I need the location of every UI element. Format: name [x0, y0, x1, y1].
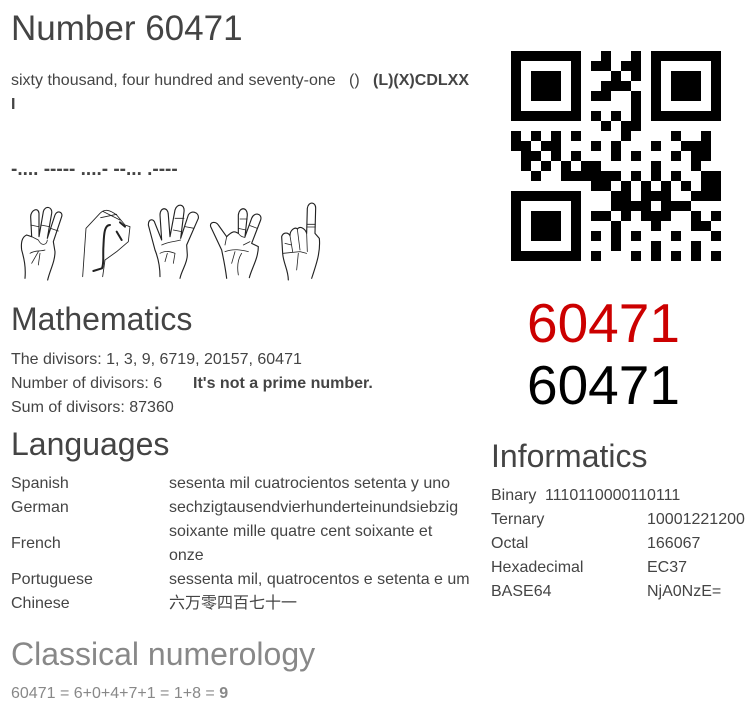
informatics table: 10001221200	[647, 511, 745, 528]
numerology sum: 60471 = 6+0+4+7+1 = 1+8 = 9	[11, 685, 228, 702]
morse code: -.... ----- ....- --... .----	[11, 159, 178, 180]
languages table: sechzigtausendvierhunderteinundsiebzig	[169, 499, 458, 516]
languages table: onze	[169, 547, 204, 564]
number in words and roman numeral: sixty thousand, four hundred and seventy-one	[11, 72, 336, 89]
divisors block: Number of divisors: 6	[11, 375, 162, 392]
number in words and roman numeral: ()	[349, 72, 360, 89]
informatics table: Hexadecimal	[491, 559, 583, 576]
number in words and roman numeral: I	[11, 96, 15, 113]
languages table: Chinese	[11, 595, 70, 612]
languages table: soixante mille quatre cent soixante et	[169, 523, 432, 540]
languages table: 六万零四百七十一	[169, 595, 297, 612]
icon: hand sign 7	[210, 209, 261, 278]
divisors block: The divisors: 1, 3, 9, 6719, 20157, 60471	[11, 351, 302, 368]
informatics table: BASE64	[491, 583, 551, 600]
languages table: German	[11, 499, 69, 516]
heading: mathematics: Mathematics	[11, 301, 192, 337]
sign language hands	[20, 202, 320, 281]
informatics table: Ternary	[491, 511, 544, 528]
languages table: sessenta mil, quatrocentos e setenta e um	[169, 571, 470, 588]
large red number: 60471	[527, 292, 680, 354]
informatics table: Binary	[491, 487, 536, 504]
languages table: Portuguese	[11, 571, 93, 588]
title: Number 60471	[11, 9, 243, 48]
number in words and roman numeral	[11, 72, 469, 113]
informatics table: Octal	[491, 535, 528, 552]
languages table: Spanish	[11, 475, 69, 492]
icon: hand sign 4	[148, 205, 198, 278]
heading: classical numerology: Classical numerology	[11, 636, 315, 672]
QR code	[511, 51, 721, 261]
informatics table: NjA0NzE=	[647, 583, 721, 600]
languages table	[11, 475, 470, 612]
heading: languages: Languages	[11, 426, 169, 462]
divisors block: It's not a prime number.	[193, 375, 373, 392]
informatics table	[491, 487, 745, 600]
informatics table: 166067	[647, 535, 700, 552]
icon: hand sign 0	[83, 210, 130, 277]
divisors block: Sum of divisors: 87360	[11, 399, 174, 416]
heading: informatics: Informatics	[491, 438, 647, 474]
divisors block	[11, 351, 373, 416]
number in words and roman numeral: (L)(X)CDLXX	[373, 72, 469, 89]
informatics table: 1110110000110111	[545, 487, 680, 504]
icon: hand sign 6	[21, 207, 62, 280]
languages table: French	[11, 535, 61, 552]
icon: hand sign 1	[282, 203, 320, 280]
informatics table: EC37	[647, 559, 687, 576]
languages table: sesenta mil cuatrocientos setenta y uno	[169, 475, 450, 492]
large black number: 60471	[527, 354, 680, 416]
